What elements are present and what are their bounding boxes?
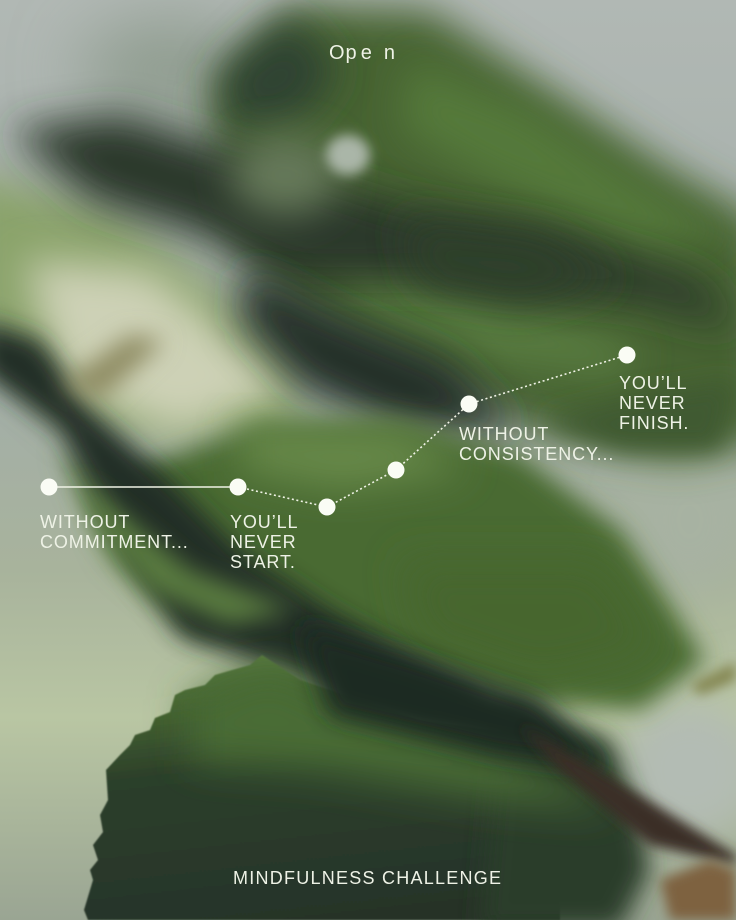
dotted segments xyxy=(238,355,627,507)
data points xyxy=(40,346,636,516)
light left area xyxy=(0,170,300,440)
top darker grey xyxy=(80,20,260,120)
label: you'll never finish: FINISH. xyxy=(619,413,689,433)
right grey patches xyxy=(620,700,736,840)
solid segment xyxy=(49,486,238,488)
label: you'll never finish xyxy=(619,373,689,433)
dark band upper xyxy=(10,115,736,330)
stem xyxy=(520,725,736,865)
label: you'll never start xyxy=(230,512,298,572)
label: without commitment: COMMITMENT... xyxy=(40,532,189,552)
heading: Open: Ope n xyxy=(329,42,396,64)
label: without commitment: WITHOUT xyxy=(40,512,130,532)
upper leaf xyxy=(210,5,736,460)
stem dark diagonal xyxy=(0,320,490,720)
middle leaf xyxy=(130,420,705,710)
left mid green xyxy=(60,450,300,640)
footer: mindfulness challenge: MINDFULNESS CHALLENGE xyxy=(233,868,502,888)
twig detail xyxy=(60,335,165,400)
label: you'll never finish: YOU’LL xyxy=(619,373,687,393)
label: you'll never start: START. xyxy=(230,552,296,572)
label: without commitment xyxy=(40,512,189,552)
label: you'll never start: YOU’LL xyxy=(230,512,298,532)
label: without consistency: CONSISTENCY... xyxy=(459,444,614,464)
label: you'll never finish: NEVER xyxy=(619,393,686,413)
pale spots xyxy=(230,135,340,215)
label: without consistency xyxy=(459,424,614,464)
label: without consistency: WITHOUT xyxy=(459,424,549,444)
dried leaf tip bottom right xyxy=(660,860,736,920)
label: you'll never start: NEVER xyxy=(230,532,297,552)
bottom leaf xyxy=(84,655,560,920)
